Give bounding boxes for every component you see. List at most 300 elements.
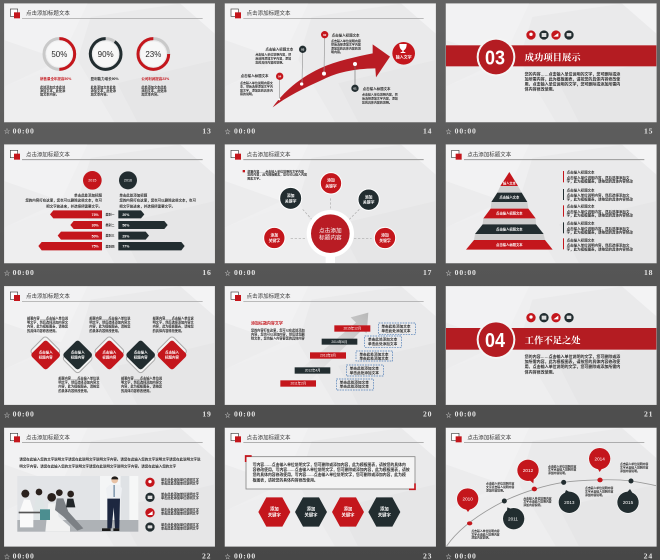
pyramid tiers: 点击输入标题文本 (496, 226, 523, 231)
ring captions: 公司利润提高23% (141, 76, 169, 81)
header (231, 150, 424, 160)
callout texts: 您的具体内容的说明。 (255, 60, 285, 65)
ring 90% (84, 33, 127, 75)
tier descriptions: 点击输入标题文本 (567, 204, 595, 209)
intro text: 除文本，您也输入内容要您的具体内容 (251, 336, 305, 341)
category labels: 类别二 (106, 222, 114, 227)
descriptions (25, 192, 197, 208)
seated people (19, 489, 83, 532)
footer 17: ☆ (225, 270, 231, 278)
keyword nodes: 添加 (381, 233, 389, 238)
pin 04 (276, 73, 283, 100)
left bars (38, 210, 102, 250)
list text: 单击此处添加单位说明文字 (161, 477, 199, 482)
tier descriptions: 点击输入标题文本 (567, 188, 595, 193)
dashed note boxes: 单击此处添加文本 (340, 384, 369, 389)
center node: 标题内容 (319, 233, 342, 241)
callout texts: 添加您的具体内容的说 (331, 45, 361, 50)
year notes: 文字点击输入说明内容 (620, 465, 648, 469)
callout texts: 容文字，添加您的具体内 (240, 87, 273, 92)
footer 18: 00:00 (455, 268, 477, 277)
dashed note boxes: 单击此处添加文本 (368, 341, 398, 346)
header: 点击添加标题文本 (26, 9, 70, 17)
text frame: 您的具体内容修改使用。写内容……点击输入单位说明文字，您可删除或添加内容，此为模 (253, 472, 406, 477)
diamond texts: 部署内容……点击输入单位说 (89, 315, 131, 320)
footer 18: 18 (644, 268, 653, 277)
descriptions: 单击此处添加标题 (119, 192, 148, 197)
diamonds: 标题内容 (134, 354, 148, 359)
callout texts: 点击输入单位说明内容文 (240, 80, 273, 85)
year notes: 文字点击输入说明内容 (486, 485, 514, 489)
year notes (471, 462, 648, 540)
ring captions: 此处添加文本此处 (40, 84, 66, 89)
header: 点击添加标题文本 (26, 292, 70, 300)
hexagons: 关键字 (378, 511, 391, 518)
red arrow (273, 44, 390, 107)
diamonds: 标题内容 (102, 354, 117, 359)
right bars: 20% (122, 213, 129, 217)
pin 02 (321, 31, 328, 76)
tier descriptions: 点击输入标题文本 (567, 221, 595, 226)
ring 50%: 50% (51, 50, 67, 59)
tier descriptions: 点击输入单位说明内容，然后选择添加文 (567, 243, 630, 248)
descriptions: 您的内容打在这里，您也可以删除这些文本，也可 (25, 198, 103, 203)
dashed note boxes: 单击此处添加文本 (350, 370, 379, 375)
footer 13: 00:00 (13, 126, 35, 135)
body text: 您的内容……点击输入单位说明的文字，您可删除或添 (525, 70, 620, 76)
slide 13: three progress rings (4, 3, 215, 136)
slide 19: diamonds (4, 286, 215, 419)
diamond texts: 明文字，然后选择添加内容文 (27, 319, 69, 324)
date bars: 2014年6月 (331, 339, 347, 344)
year notes: 文字点击输入说明内容 (471, 532, 500, 536)
footer 15: 15 (644, 126, 653, 135)
tier descriptions (563, 170, 633, 251)
ring captions: 添加文本，此处添 (40, 88, 66, 93)
ring captions: 销售量全年提高50% (40, 76, 71, 81)
dashed note boxes: 单击此处添加文本 (359, 351, 389, 356)
slide 24: year curve timeline (446, 428, 657, 560)
left bars: 30% (92, 224, 99, 228)
footer 19: ☆ (4, 411, 10, 419)
diamond texts: 内容，此为模板图表，请按您 (153, 324, 195, 329)
category labels: 类别四 (106, 243, 114, 248)
body text (525, 353, 620, 375)
icons (526, 313, 574, 322)
year notes: 添加内容说明。 (486, 489, 506, 493)
slide 14: curved arrow (225, 3, 436, 136)
diamond texts: 部署内容……点击输入单位说 (58, 375, 100, 380)
year pins: 2011 (508, 516, 518, 521)
keyword nodes: 添加 (327, 178, 335, 183)
slide 22: photo and list (4, 428, 215, 560)
descriptions: 单击此处添加标题 (74, 192, 102, 197)
trophy circle: 输入文字 (396, 54, 412, 60)
year notes: 文字点击输入说明内容 (585, 489, 613, 493)
tier descriptions: 字，此为模板图表，请按您的具体内容修改 (567, 179, 633, 184)
footer 23 (225, 551, 432, 560)
curve (447, 480, 656, 546)
pin 03: 03 (301, 48, 305, 52)
ring captions: 添加文本，此处添 (141, 88, 167, 93)
list text: 单击此处添加单位说明文字 (161, 522, 199, 527)
footer 15: ☆ (446, 128, 452, 136)
list text (161, 477, 199, 530)
tier descriptions: 点击输入标题文本 (567, 170, 595, 175)
body text: 加所需内容，此为模板图表，请按您的具体内容修改使 (525, 358, 620, 364)
footer 20: 20 (423, 410, 432, 419)
year circles: 2015 (88, 179, 96, 183)
dashed note boxes: 单击此处添加文本 (359, 355, 389, 360)
tier descriptions: 字，此为模板图表，请按您的具体内容修改 (567, 230, 633, 235)
year circles: 2016 (124, 179, 132, 183)
footer 14: 00:00 (234, 126, 256, 135)
list text: 单击此处添加单位说明文字 (161, 510, 199, 515)
diamond texts: 明文字，然后选择添加内容文 (121, 379, 163, 384)
pin 01 (351, 62, 359, 92)
diamond texts: 明文字，然后选择添加内容文 (58, 379, 100, 384)
keyword nodes: 关键字 (379, 238, 391, 243)
header (231, 292, 424, 301)
callout texts: 本，然后选择添加文字内 (240, 84, 273, 89)
callout texts: 点击输入标题文本 (241, 73, 269, 78)
header (10, 292, 203, 301)
diamond texts (27, 315, 195, 393)
bullet text: 部署内容……点击输入单位说明的文字内容 (247, 168, 304, 173)
footer 14: 14 (423, 126, 432, 135)
intro text: 添加标题内容文字 (251, 320, 283, 326)
header: 点击添加标题文本 (247, 150, 291, 158)
tier descriptions: 点击输入单位说明内容，然后选择添加文 (567, 193, 630, 198)
diamond texts: 的具体内容修改使用。 (121, 388, 153, 393)
tier descriptions: 字，此为模板图表，请按您的具体内容修改 (567, 213, 633, 218)
footer 16: 16 (202, 268, 212, 277)
standing presenter (102, 476, 122, 531)
pyramid tiers: 点击输入标题文本 (496, 242, 523, 247)
category labels: 类别一 (106, 211, 114, 216)
hexagons: 添加 (270, 505, 279, 512)
diamonds: 标题内容 (39, 354, 53, 359)
hexagons: 添加 (344, 505, 352, 512)
ring captions: 加文本内容。 (40, 92, 59, 97)
diamond texts: 部署内容……点击输入单位说 (121, 375, 163, 380)
date bars: 2013年8月 (320, 353, 336, 358)
header (10, 433, 203, 443)
descriptions: 把文字放进来，并选择所需要文字。 (46, 203, 102, 208)
text frame: 板图表，请按您的具体内容修改使用。 (253, 477, 318, 482)
diamond texts: 部署内容……点击输入单位说 (27, 315, 69, 320)
intro text: 明文字内容。请您在此输入您的文字说明文字请您在此说明文字说明文字内容。请您在此输入您的文字 (19, 463, 177, 468)
keyword nodes: 添加 (365, 194, 373, 199)
footer 14 (225, 126, 432, 136)
bullet text (243, 168, 307, 180)
text frame (246, 456, 415, 489)
footer 21: 00:00 (455, 410, 477, 419)
number badge: 04 (485, 329, 505, 352)
left bars: 75% (92, 245, 99, 249)
date bars (280, 325, 370, 387)
slide 16: butterfly bars (4, 144, 215, 278)
date bars: 2015年12月 (343, 326, 361, 331)
footer 17 (225, 268, 432, 278)
right bars: 29% (122, 234, 129, 238)
header (231, 433, 424, 443)
year pins: 2015 (623, 500, 634, 505)
list text: 单击此处添加单位说明文字 (161, 492, 199, 497)
year notes: 文字点击输入说明内容 (548, 468, 576, 472)
ring captions: 盈利能力增长90% (91, 76, 119, 81)
list text: 单击此处添加单位说明文字 (161, 507, 199, 512)
callout texts: 点击输入标题文本 (332, 33, 360, 38)
text frame: 写内容……点击输入单位说明文字，您可删除或添加内容，此为模板图表，请按您的具体内 (253, 462, 406, 467)
callout texts: 明内容。 (331, 49, 343, 54)
callout texts: 点击输入标题文本 (363, 86, 391, 91)
diamond texts: 内容，此为模板图表，请按您 (89, 324, 131, 329)
footer 16: ☆ (4, 270, 10, 278)
right bars: 77% (122, 245, 129, 249)
ring captions: 加文本内容。 (141, 92, 160, 97)
footer 24 (446, 551, 653, 560)
pin 01: 01 (353, 87, 357, 91)
section title: 工作不足之处 (525, 335, 581, 347)
slide 18: pyramid (446, 144, 657, 278)
year notes: 点击输入单位说明内容 (486, 482, 514, 486)
keyword nodes: 添加 (287, 193, 295, 198)
year notes: 添加内容说明。 (471, 536, 491, 540)
trophy circle (392, 42, 415, 65)
footer 15 (446, 126, 653, 136)
keyword nodes: 关键字 (269, 238, 280, 243)
footer 20: ☆ (225, 411, 231, 419)
keyword nodes: 关键字 (363, 200, 375, 205)
year pins: 2012 (523, 468, 534, 473)
center node: 点击添加 (319, 226, 342, 234)
header: 点击添加标题文本 (26, 433, 70, 441)
dashed note boxes: 单击此处添加文本 (368, 337, 398, 342)
tier descriptions: 点击输入标题文本 (567, 238, 595, 243)
footer 17: 00:00 (234, 268, 256, 277)
footer 14: ☆ (225, 128, 231, 136)
footer 13: 13 (202, 126, 212, 135)
ring captions: 加文本内容。 (91, 92, 110, 97)
ring captions: 此处添加文本此处 (141, 84, 167, 89)
diamond outlines (30, 336, 188, 374)
slide 15: section 03 (446, 3, 657, 136)
footer 21 (446, 410, 653, 419)
diamond texts: 明文字，然后选择添加内容文 (153, 319, 195, 324)
hexagons (258, 497, 400, 527)
body text: 用。点击输入单位说明的文字，您可删除或添加所需内 (525, 363, 620, 369)
keyword nodes (264, 173, 396, 249)
header: 点击添加标题文本 (247, 433, 291, 441)
diamond texts: 内容，此为模板图表，请按您 (27, 324, 69, 329)
callout texts: 后选择添加文字内容，添加 (362, 95, 398, 100)
diamond texts: 的具体内容修改使用。 (153, 328, 184, 333)
callout texts: 然后选择添加文字内容 (331, 42, 361, 47)
diamond texts: 明文字，然后选择添加内容文 (89, 319, 131, 324)
pin 04: 04 (278, 75, 282, 79)
number badge (477, 320, 515, 359)
left bars: 50% (92, 234, 99, 238)
footer 21: 21 (644, 410, 653, 419)
date bars: 2011年2月 (290, 381, 306, 386)
list text: 单击此处添加单位说明文字 (161, 480, 199, 485)
footer 13 (4, 126, 212, 136)
footer 19 (4, 410, 212, 419)
descriptions: 您的内容打在这里，您也可以删除这些文本，也可 (119, 198, 197, 203)
grey arrow (292, 313, 368, 383)
year notes: 点击输入单位说明内容 (548, 464, 576, 468)
diamond texts: 的具体内容修改使用。 (58, 388, 90, 393)
diamond texts: 内容，此为模板图表，请按您 (121, 384, 163, 389)
ring 90%: 90% (98, 50, 114, 59)
footer 18: ☆ (446, 270, 452, 278)
diamonds: 点击输入 (134, 350, 148, 355)
header: 点击添加标题文本 (247, 292, 291, 300)
footer 16: 00:00 (13, 268, 35, 277)
slide 20: stepped timeline (225, 286, 436, 419)
text frame: 容修改使用。写内容……点击输入单位说明文字，您可删除或添加内容，此为模板图表，请按 (253, 467, 410, 472)
pyramid tiers: 点击输入文本 (499, 194, 520, 199)
dashed note boxes (336, 323, 415, 390)
category labels: 类别三 (106, 233, 114, 238)
tier descriptions: 点击输入单位说明内容，然后选择添加文 (567, 175, 630, 180)
ring 23%: 23% (145, 50, 161, 59)
diamonds: 点击输入 (39, 350, 53, 355)
year notes: 添加内容说明。 (585, 493, 605, 497)
year notes: 添加内容说明。 (548, 471, 568, 475)
diamond texts: 的具体内容修改使用。 (89, 328, 121, 333)
dashed note boxes: 单击此处添加文本 (340, 380, 369, 385)
pyramid tiers (466, 172, 553, 250)
diamonds: 点击输入 (165, 350, 179, 355)
hexagons: 关键字 (342, 511, 355, 518)
keyword nodes: 关键字 (285, 198, 297, 203)
hexagons: 添加 (380, 505, 389, 512)
year notes: 点击输入单位说明内容 (471, 529, 500, 533)
footer 17: 17 (423, 268, 432, 277)
callout texts (240, 33, 398, 104)
red band (446, 45, 656, 66)
header (231, 9, 424, 18)
callout texts: 点击输入标题文本 (265, 46, 294, 51)
left bars: 73% (92, 213, 99, 217)
footer 22 (4, 551, 211, 560)
center node (307, 210, 354, 263)
training room photo (17, 476, 138, 532)
keyword nodes: 关键字 (325, 183, 337, 188)
descriptions: 把文字放进来，并选择所需要文字。 (119, 203, 175, 208)
dashed note boxes: 单击此处添加文本 (381, 324, 411, 329)
year notes: 点击输入单位说明内容 (523, 496, 552, 500)
list text: 单击此处添加单位说明文字 (161, 525, 199, 530)
year pins: 2010 (462, 497, 473, 502)
diamond texts: 内容，此为模板图表，请按您 (58, 384, 100, 389)
pyramid tiers: 点击输入标题文本 (496, 211, 523, 216)
header (452, 433, 644, 443)
intro text: 内容，您也可以添加内容，然后请您删 (251, 331, 305, 336)
ring captions: 添加文本，此处添 (91, 88, 117, 93)
hexagons: 关键字 (268, 511, 281, 518)
intro text: 您的内容打在这里，您可以在此处添加 (251, 327, 305, 332)
diamonds: 标题内容 (71, 354, 85, 359)
icons (526, 30, 574, 40)
dashed connectors (291, 198, 372, 238)
header: 点击添加标题文本 (26, 150, 70, 158)
header: 点击添加标题文本 (467, 150, 512, 158)
footer 15: 00:00 (455, 126, 477, 135)
diamonds: 标题内容 (165, 354, 179, 359)
year pins: 2013 (564, 500, 575, 505)
hexagons: 关键字 (305, 511, 318, 518)
intro text (251, 320, 305, 341)
year circles (83, 171, 137, 190)
year notes: 添加内容说明。 (523, 503, 543, 507)
callout texts: 您的具体内容的说明。 (362, 99, 392, 104)
intro text (19, 457, 201, 468)
pin 03 (299, 46, 306, 86)
header (452, 150, 644, 160)
right bars (118, 210, 185, 250)
body text: 体内容修改使用。 (525, 85, 557, 91)
header (10, 150, 203, 160)
tier descriptions: 字，此为模板图表，请按您的具体内容修改 (567, 246, 633, 251)
header: 点击添加标题文本 (247, 9, 291, 17)
slide 17: radial keywords (225, 144, 436, 278)
header (10, 9, 203, 18)
footer 21: ☆ (446, 411, 452, 419)
ring 23% (138, 39, 169, 69)
hexagons: 添加 (307, 505, 315, 512)
curve dots (467, 478, 633, 525)
diamonds: 点击输入 (102, 350, 117, 355)
dashed note boxes: 单击此处添加文本 (381, 328, 411, 333)
footer 13: ☆ (4, 128, 10, 136)
footer 16 (4, 268, 212, 278)
year notes: 点击输入单位说明内容 (585, 486, 613, 490)
year notes: 添加内容说明。 (620, 469, 640, 473)
body text: 您的内容……点击输入单位说明的文字，您可删除或添 (525, 353, 620, 359)
keyword nodes: 添加 (271, 233, 278, 238)
date bars: 2012年4月 (305, 368, 321, 373)
bullet text: 图表文字。 (247, 175, 262, 180)
number badge: 03 (485, 46, 505, 69)
bullet text: 您的内容，此为模板图表，您也可以输入内容 (247, 172, 307, 177)
footer 19: 00:00 (13, 410, 35, 419)
year notes: 点击输入单位说明内容 (620, 462, 648, 466)
body text: 体内容修改使用。 (525, 369, 557, 375)
year pins (456, 447, 639, 530)
section title: 成功项目展示 (525, 52, 581, 64)
callout texts: 点击输入单位说明内容 (331, 38, 361, 43)
callout texts: 容的说明。 (240, 91, 255, 96)
ring captions (40, 76, 169, 97)
pin 02: 02 (323, 33, 327, 37)
tier descriptions: 点击输入单位说明内容，然后选择添加文 (567, 226, 630, 231)
footer 20 (225, 410, 432, 419)
red band (446, 328, 656, 350)
list icons (145, 478, 155, 532)
callout texts: 点击输入单位说明内容，然 (255, 52, 291, 57)
callout texts: 点击输入单位说明内容，然 (362, 91, 398, 96)
body text (525, 70, 620, 91)
diamond texts: 部署内容……点击输入单位说 (153, 315, 195, 320)
slide 21: section 04 (446, 286, 657, 419)
year pins: 2014 (594, 456, 605, 461)
body text: 加所需内容，此为模板图表，请按您的具体内容修改使 (525, 75, 620, 81)
ring captions: 此处添加文本此处 (91, 84, 117, 89)
footer 18 (446, 268, 653, 278)
